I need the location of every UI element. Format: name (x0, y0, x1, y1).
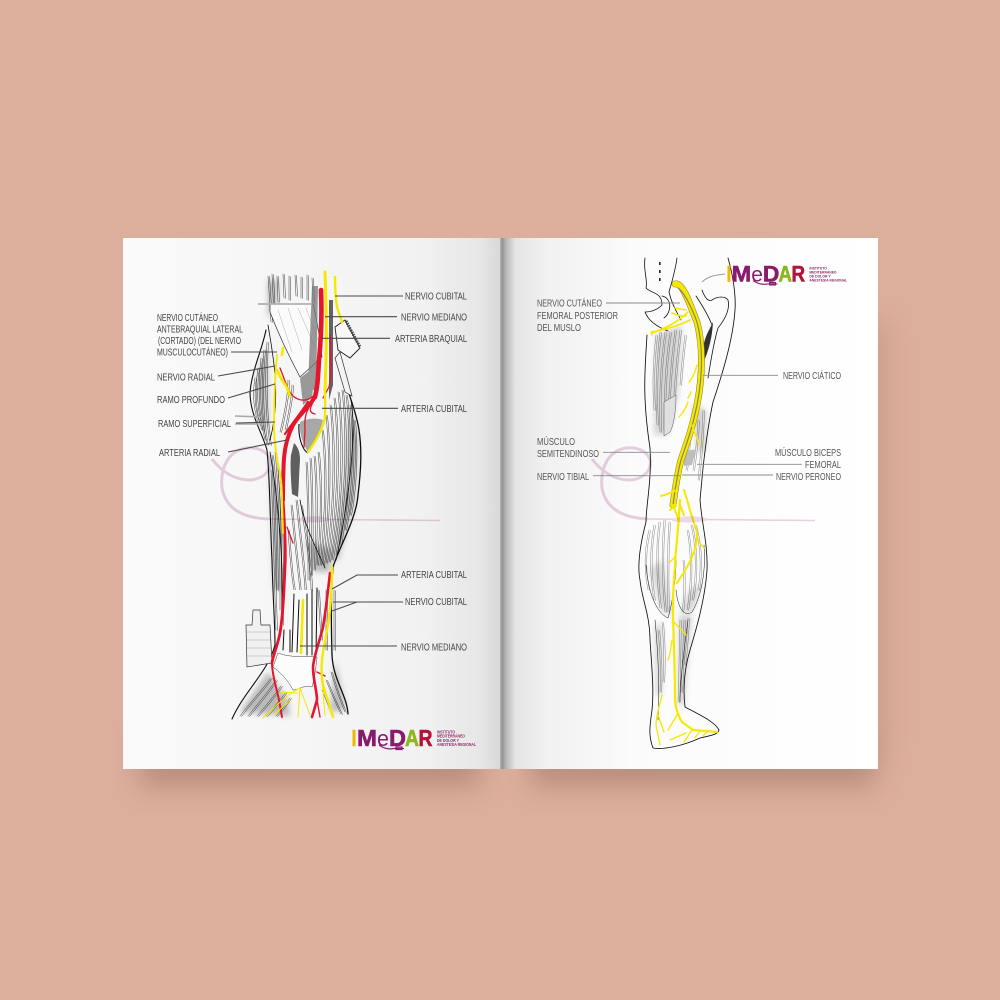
tendon band (335, 352, 352, 396)
nerve: ulnar upper (335, 277, 342, 322)
nerve: gluteal branches (651, 308, 690, 335)
label: músculo semitendinoso: MÚSCULO (537, 435, 575, 448)
logo: IMEDAR right page: I (726, 262, 731, 287)
logo: IMEDAR right page: R (791, 262, 805, 287)
label: músculo biceps femoral: FEMORAL (805, 459, 841, 471)
illustration: posterior leg anatomy (639, 258, 735, 748)
logo: IMEDAR right page (726, 262, 848, 287)
label: arteria radial (159, 440, 287, 459)
label: músculo biceps femoral: MÚSCULO BICEPS (775, 446, 841, 459)
label: arteria cubital (lower): ARTERIA CUBITAL (401, 569, 467, 581)
label: ramo superficial: RAMO SUPERFICIAL (158, 418, 231, 430)
nerve: minor branches (656, 540, 708, 745)
label: nervio mediano (lower): NERVIO MEDIANO (401, 642, 467, 654)
muscle hatching (240, 274, 355, 716)
label: nervio cutáneo antebraquial lateral (157, 311, 277, 358)
label: arteria cubital (lower) (332, 569, 467, 589)
wrist tendons (284, 590, 316, 655)
label: nervio peroneo: NERVIO PERONEO (776, 471, 841, 483)
label: nervio cutáneo femoral posterior del muslo: FEMORAL POSTERIOR (537, 310, 618, 322)
label: nervio cutáneo antebraquial lateral: NERVIO CUTÁNEO (157, 311, 218, 324)
watermark: right page swirl (592, 448, 815, 522)
label: nervio cutáneo femoral posterior del muslo: DEL MUSLO (537, 322, 581, 334)
leg tone (650, 325, 706, 705)
logo: IMEDAR left page: A (405, 725, 419, 751)
label: nervio cutáneo femoral posterior del muslo (537, 296, 680, 334)
artery: ulnar lower (312, 573, 330, 717)
label: nervio cubital (top): NERVIO CUBITAL (405, 290, 467, 302)
label: músculo semitendinoso (537, 435, 670, 460)
label: arteria radial: ARTERIA RADIAL (159, 447, 220, 459)
watermark: left page swirl (212, 448, 440, 522)
muscle hatching: denser layer (242, 274, 357, 716)
logo: IMEDAR left page: D (389, 725, 406, 751)
logo: IMEDAR left page: M (357, 725, 377, 751)
logo: IMEDAR right page: ANESTESIA REGIONAL (809, 278, 848, 283)
bandage (246, 610, 272, 667)
nerve: knee branching (661, 490, 688, 527)
label: nervio radial (157, 366, 275, 384)
logo: IMEDAR left page: R (418, 725, 433, 751)
forearm silhouette (232, 278, 361, 719)
label: nervio cutáneo femoral posterior del muslo: NERVIO CUTÁNEO (537, 296, 602, 310)
pelvis and femur (645, 258, 729, 378)
logo: IMEDAR left page: MEDITERRÁNEO (437, 734, 466, 739)
nerve: radial (274, 355, 283, 533)
logo: IMEDAR right page: INSTITUTO (809, 265, 827, 270)
label: músculo biceps femoral (697, 446, 841, 471)
label: nervio radial: NERVIO RADIAL (157, 372, 215, 384)
label: nervio cutáneo antebraquial lateral: MUSCULOCUTÁNEO) (157, 346, 228, 358)
logo: IMEDAR right page: A (778, 262, 792, 287)
label: arteria braquial: ARTERIA BRAQUIAL (395, 333, 467, 345)
leg outline (639, 335, 719, 748)
label: nervio mediano (top): NERVIO MEDIANO (401, 311, 467, 323)
central column shadow (308, 286, 318, 392)
logo: IMEDAR left page: INSTITUTO (437, 730, 456, 734)
logo: IMEDAR left page: DE DOLOR Y (437, 738, 459, 743)
hatched muscle bundle (291, 443, 300, 497)
nerve: sciatic (673, 284, 702, 505)
label: nervio cubital (lower): NERVIO CUBITAL (405, 596, 467, 608)
popliteal detail (664, 395, 676, 436)
logo: IMEDAR right page: MEDITERRÁNEO (809, 269, 837, 274)
book shadow (140, 320, 886, 787)
nerve: sciatic inner gap (673, 288, 702, 505)
artery: branches (280, 335, 331, 543)
logo: IMEDAR right page: e (751, 263, 763, 287)
cut skin stubs (235, 416, 266, 424)
fossa shadow (300, 419, 323, 452)
label: nervio cubital (lower) (332, 596, 467, 611)
nerve: thigh branches (679, 365, 700, 445)
label: nervio tibial: NERVIO TIBIAL (537, 471, 589, 483)
logo: IMEDAR right page: M (732, 262, 751, 287)
label: ramo profundo: RAMO PROFUNDO (157, 394, 225, 406)
muscle tone (240, 280, 358, 716)
nerve: median (325, 272, 326, 390)
nerve: tibial lower (673, 500, 717, 732)
wrist retinaculum (273, 653, 317, 690)
nerve: median lower (301, 600, 303, 653)
thigh outer line (700, 258, 735, 500)
muscle hatching: denser layer (647, 330, 705, 702)
muscle hatching (645, 330, 703, 702)
panel: right page (500, 238, 878, 769)
label: nervio cubital (top) (335, 290, 467, 302)
label: ramo profundo (157, 384, 275, 406)
artery: brachial and radial (315, 290, 321, 397)
label: arteria cubital (middle): ARTERIA CUBITAL (401, 403, 467, 415)
label: músculo semitendinoso: SEMITENDINOSO (537, 448, 599, 460)
label: nervio cutáneo antebraquial lateral: ANTEBRAQUIAL LATERAL (157, 324, 243, 336)
logo: IMEDAR left page: ANESTESIA REGIONAL (437, 742, 476, 747)
logo: IMEDAR left page: I (352, 725, 356, 751)
nerve: sciatic edge (673, 284, 702, 505)
cut muscle flap (270, 304, 322, 377)
panel: left page (123, 238, 500, 769)
logo: IMEDAR right page: DE DOLOR Y (809, 274, 831, 279)
gluteal sprig (702, 274, 725, 282)
logo: IMEDAR left page: e (377, 726, 389, 751)
label: nervio cutáneo antebraquial lateral: (CORTADO) (DEL NERVIO (158, 335, 241, 347)
nerve: ulnar lower (322, 567, 333, 717)
illustration: forearm anatomy (232, 272, 361, 719)
label: nervio ciático: NERVIO CIÁTICO (783, 369, 841, 382)
leg silhouette (639, 300, 733, 748)
cut muscle strip (335, 320, 360, 358)
logo: IMEDAR left page (352, 725, 476, 751)
leg inner outline (646, 545, 704, 720)
nerve: palm branches (263, 680, 325, 718)
nerve: peroneal (677, 503, 697, 583)
forearm contours (232, 330, 275, 719)
logo: IMEDAR right page: D (763, 262, 779, 287)
label: nervio ciático (703, 369, 841, 382)
